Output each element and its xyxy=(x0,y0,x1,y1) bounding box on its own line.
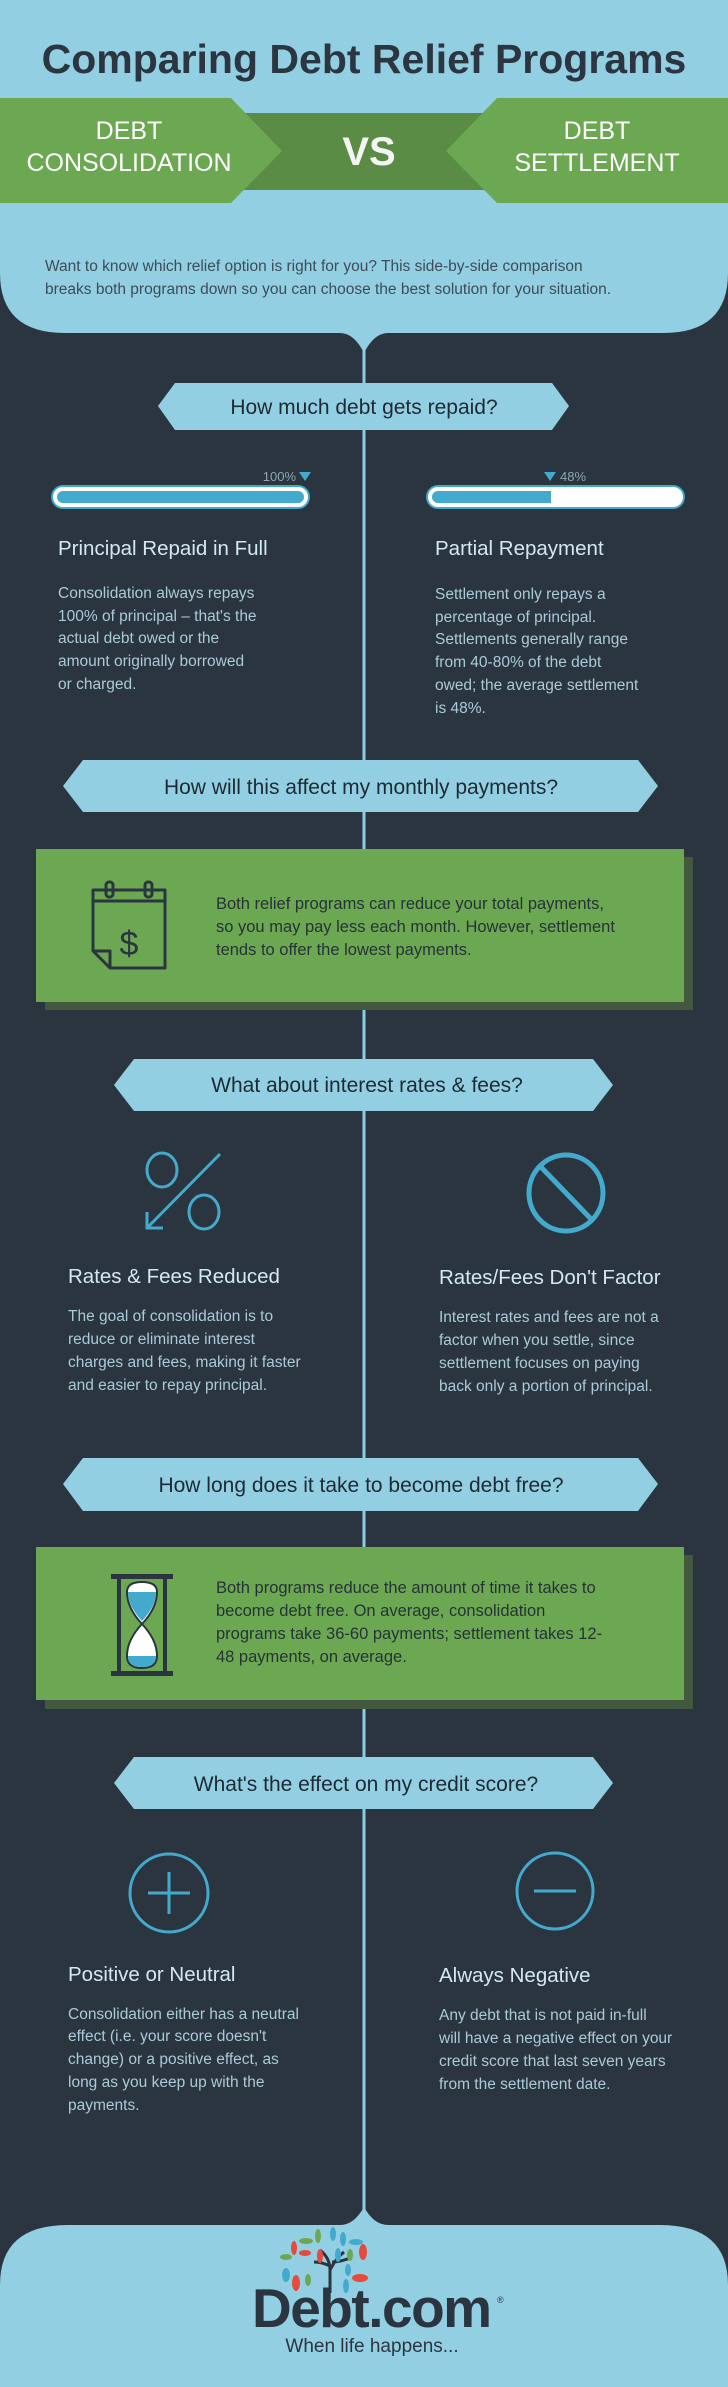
green panel: time to debt free: 48 payments, on average. xyxy=(216,1648,407,1666)
left column: rates & fees reduced: charges and fees, making it faster xyxy=(68,1354,301,1371)
left column: principal repaid in full: or charged. xyxy=(58,676,136,693)
right column: always negative xyxy=(438,1964,677,2093)
left column: rates & fees reduced: The goal of consolidation is to xyxy=(68,1308,273,1325)
question banner 1 xyxy=(158,383,569,430)
footer panel xyxy=(0,2207,728,2387)
icon: minus circle xyxy=(517,1853,593,1929)
right column: always negative: from the settlement date. xyxy=(439,2076,610,2093)
right column: always negative: credit score that last seven years xyxy=(439,2053,666,2070)
question banner 5: What's the effect on my credit score? xyxy=(194,1773,538,1796)
banner: debt consolidation vs debt settlement: DEBT xyxy=(564,117,630,145)
tagline: When life happens... xyxy=(285,2336,459,2357)
right column: partial repayment: from 40-80% of the debt xyxy=(435,654,602,671)
green panel: time to debt free: Both programs reduce the amount of time it takes to xyxy=(216,1579,596,1597)
progress bar: 48%: 48% xyxy=(560,469,586,484)
left column: positive or neutral xyxy=(68,1963,303,2114)
question banner 3 xyxy=(114,1059,613,1111)
left column: positive or neutral: change) or a positive effect, as xyxy=(68,2051,279,2068)
green panel: time to debt free xyxy=(36,1547,693,1709)
right column: partial repayment: Settlements generally range xyxy=(435,631,628,648)
icon: calendar with dollar: $ xyxy=(120,925,139,963)
title: Comparing Debt Relief Programs xyxy=(42,36,686,82)
green panel: monthly payments xyxy=(36,849,693,1010)
green panel: monthly payments: so you may pay less each month. However, settlement xyxy=(216,918,615,936)
right column: rates/fees don't factor: back only a portion of principal. xyxy=(439,1378,653,1395)
icon: percent with down arrow xyxy=(147,1153,220,1229)
intro text line 2: breaks both programs down so you can choose the best solution for your situation. xyxy=(45,281,611,298)
right column: always negative: will have a negative effect on your xyxy=(438,2030,672,2047)
icon: hourglass xyxy=(111,1574,173,1676)
center timeline line xyxy=(362,340,366,2220)
left column: principal repaid in full: 100% of principal – that's the xyxy=(58,608,257,625)
progress bar: 48% xyxy=(427,469,684,508)
right column: partial repayment: owed; the average settlement xyxy=(435,677,639,694)
banner: debt consolidation vs debt settlement xyxy=(0,98,728,203)
icon: calendar with dollar xyxy=(93,882,165,968)
right column: partial repayment: is 48%. xyxy=(435,700,486,717)
right column: rates/fees don't factor xyxy=(439,1266,663,1395)
question banner 2: How will this affect my monthly payments? xyxy=(164,776,558,799)
icon: plus circle xyxy=(130,1854,208,1932)
left column: rates & fees reduced: and easier to repay principal. xyxy=(68,1377,267,1394)
left column: positive or neutral: Consolidation either has a neutral xyxy=(68,2006,299,2023)
banner: debt consolidation vs debt settlement: DEBT xyxy=(96,117,162,145)
right column: rates/fees don't factor: settlement focuses on paying xyxy=(439,1355,640,1372)
left column: rates & fees reduced: reduce or eliminate interest xyxy=(68,1331,256,1348)
green panel: time to debt free: become debt free. On average, consolidation xyxy=(216,1602,545,1620)
right column: partial repayment: Partial Repayment xyxy=(435,537,604,560)
right column: rates/fees don't factor: Rates/Fees Don't Factor xyxy=(439,1266,661,1289)
left column: rates & fees reduced: Rates & Fees Reduced xyxy=(68,1265,280,1288)
left column: principal repaid in full: Consolidation always repays xyxy=(58,585,255,602)
left column: principal repaid in full: amount originally borrowed xyxy=(58,653,244,670)
question banner 2 xyxy=(63,760,658,812)
right column: always negative: Any debt that is not paid in-full xyxy=(439,2007,647,2024)
logo: tree xyxy=(280,2227,368,2293)
right column: partial repayment: Settlement only repays a xyxy=(435,586,606,603)
left column: principal repaid in full: Principal Repaid in Full xyxy=(58,537,268,560)
logo: Debt.com wordmark: Debt.com xyxy=(252,2277,491,2339)
left column: positive or neutral: long as you keep up with the xyxy=(68,2074,264,2091)
banner: debt consolidation vs debt settlement: VS xyxy=(342,130,396,174)
question banner 1: How much debt gets repaid? xyxy=(230,396,498,419)
left column: positive or neutral: Positive or Neutral xyxy=(68,1963,235,1986)
left column: positive or neutral: payments. xyxy=(68,2097,140,2114)
right column: rates/fees don't factor: factor when you settle, since xyxy=(439,1332,635,1349)
right column: partial repayment xyxy=(435,537,643,717)
right column: rates/fees don't factor: Interest rates and fees are not a xyxy=(439,1309,659,1326)
progress bar: 100%: 100% xyxy=(263,469,296,484)
question banner 4 xyxy=(63,1458,658,1511)
left column: principal repaid in full: actual debt owed or the xyxy=(58,630,219,647)
green panel: monthly payments: Both relief programs can reduce your total payments, xyxy=(216,895,604,913)
question banner 4: How long does it take to become debt free? xyxy=(158,1474,564,1497)
progress bar: 100% xyxy=(52,469,311,508)
left column: positive or neutral: effect (i.e. your score doesn't xyxy=(68,2028,267,2045)
green panel: time to debt free: programs take 36-60 payments; settlement takes 12- xyxy=(216,1625,602,1643)
intro text: Want to know which relief option is right for you? This side-by-side comparison xyxy=(45,258,583,275)
green panel: monthly payments: tends to offer the lowest payments. xyxy=(216,941,472,959)
left column: principal repaid in full xyxy=(58,537,268,693)
left column: rates & fees reduced xyxy=(68,1265,305,1394)
icon: prohibition sign xyxy=(529,1155,603,1231)
question banner 5 xyxy=(114,1757,613,1809)
right column: partial repayment: percentage of principal. xyxy=(435,609,596,626)
question banner 3: What about interest rates & fees? xyxy=(211,1074,523,1097)
banner: debt consolidation vs debt settlement: SETTLEMENT xyxy=(514,149,680,177)
banner: debt consolidation vs debt settlement: CONSOLIDATION xyxy=(26,149,232,177)
right column: always negative: Always Negative xyxy=(439,1964,591,1987)
header panel xyxy=(0,0,728,353)
footer panel: ® xyxy=(497,2295,504,2305)
